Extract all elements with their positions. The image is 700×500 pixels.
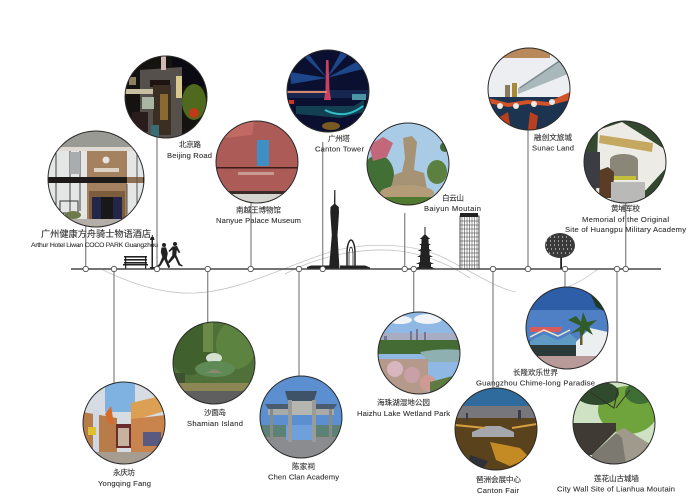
photo: hotel xyxy=(48,131,144,227)
label: Chen Clan Academy: Chen Clan Academy xyxy=(268,472,339,482)
icon: street lamp xyxy=(150,235,155,269)
label: Sunac Land: 融创文旅城 xyxy=(534,132,572,142)
label: Haizhu Lake Wetland Park: 海珠湖湿地公园 xyxy=(377,397,430,407)
label: hotel xyxy=(31,228,158,249)
label: Lianhua Mountain xyxy=(557,473,675,494)
connector lines xyxy=(86,128,626,389)
photo: Chimelong Paradise xyxy=(526,287,608,369)
label: Sunac Land xyxy=(532,132,574,152)
label: hotel: 广州健康方舟骑士物语酒店 xyxy=(41,228,151,239)
timeline nodes xyxy=(83,266,628,272)
photo: Sunac Land xyxy=(488,48,570,130)
label: Huangpu Military Academy xyxy=(565,203,686,234)
photo: Huangpu Military Academy xyxy=(584,121,666,204)
label: Yongqing Fang xyxy=(98,467,151,488)
photo: Canton Tower xyxy=(287,50,369,132)
label: Huangpu Military Academy: Memorial of the Original xyxy=(582,215,669,224)
label: Chen Clan Academy: 陈家祠 xyxy=(292,461,315,471)
label: Canton Tower: 广州塔 xyxy=(328,133,350,143)
label: Canton Fair: Canton Fair xyxy=(477,486,519,495)
timeline xyxy=(71,268,661,270)
label: Lianhua Mountain: City Wall Site of Lianhua Moutain xyxy=(557,484,675,494)
label: Nanyue Palace Museum: Nanyue Palace Museum xyxy=(216,216,301,225)
label: Shamian Island xyxy=(187,407,243,428)
photo: Haizhu Lake Wetland Park xyxy=(378,312,460,394)
label: Shamian Island: Shamian Island xyxy=(187,419,243,428)
label: Baiyun Moutain xyxy=(424,192,481,213)
label: Chimelong Paradise: Guangzhou Chime-long Paradise xyxy=(476,378,595,388)
label: Canton Fair xyxy=(476,474,521,495)
label: Baiyun Moutain: Baiyun Moutain xyxy=(424,204,481,213)
label: Chimelong Paradise xyxy=(476,367,595,388)
photo: Yongqing Fang xyxy=(83,382,165,464)
photo: Nanyue Palace Museum xyxy=(216,121,298,203)
photo: Baiyun Mountain xyxy=(362,123,450,205)
label: Shamian Island: 沙面岛 xyxy=(204,407,226,417)
label: Baiyun Moutain: 白云山 xyxy=(442,192,464,202)
label: Chen Clan Academy xyxy=(268,461,339,482)
photo: Lianhua Mountain city wall xyxy=(573,381,658,464)
label: Sunac Land: Sunac Land xyxy=(532,144,574,152)
icon: Canton Tower silhouette xyxy=(307,190,370,269)
label: Nanyue Palace Museum: 南越王博物馆 xyxy=(236,204,281,214)
label: Lianhua Mountain: 莲花山古城墙 xyxy=(594,473,639,483)
photo: Beijing Road xyxy=(125,56,207,139)
label: Haizhu Lake Wetland Park xyxy=(357,397,450,418)
label: Huangpu Military Academy: 黄埔军校 xyxy=(611,203,640,213)
photo: Chen Clan Academy xyxy=(260,376,342,458)
icon: walkers xyxy=(156,242,183,268)
label: Chimelong Paradise: 长隆欢乐世界 xyxy=(513,367,558,377)
icon: bench xyxy=(123,256,148,269)
label: Haizhu Lake Wetland Park: Haizhu Lake Wetland Park xyxy=(357,409,450,418)
icon: tower building xyxy=(460,213,479,269)
icon: tree xyxy=(545,233,575,269)
label: Beijing Road: Beijing Road xyxy=(167,151,212,160)
photo: Canton Fair xyxy=(455,388,537,471)
label: Yongqing Fang: 永庆坊 xyxy=(113,467,135,477)
label: Huangpu Military Academy: Site of Huangpu Military Academy xyxy=(565,225,686,234)
photo: Shamian Island xyxy=(168,319,256,404)
label: Canton Fair: 琶洲会展中心 xyxy=(476,474,521,484)
label: Canton Tower: Canton Tower xyxy=(315,144,364,154)
label: Canton Tower xyxy=(315,133,364,154)
label: Yongqing Fang: Yongqing Fang xyxy=(98,479,151,488)
label: Beijing Road: 北京路 xyxy=(179,139,201,149)
label: hotel: Arthur Hotel Liwan COCO PARK Guangzhou xyxy=(31,242,158,249)
icon: pagoda xyxy=(415,227,435,269)
label: Nanyue Palace Museum xyxy=(216,204,301,225)
label: Beijing Road xyxy=(167,139,212,160)
